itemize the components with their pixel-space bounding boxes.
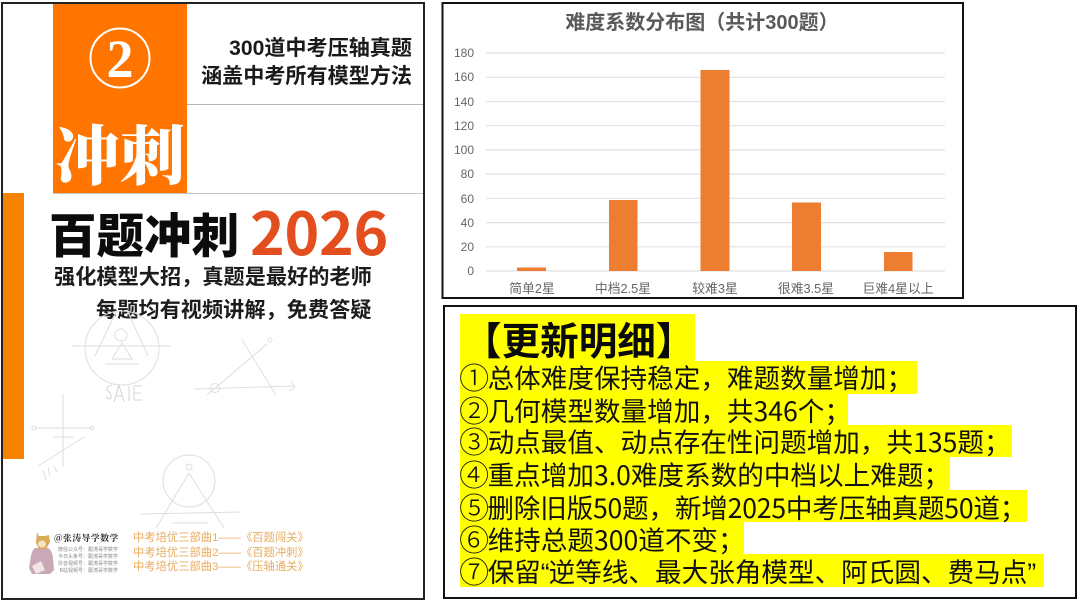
icon: doge mascot [29,532,54,574]
author accounts [58,546,118,574]
geometry sketches [32,310,296,528]
update list: 总体难度保持稳定，难题数量增加； [488,357,913,396]
y axis labels: 140 [454,95,474,109]
series list: 中考培优三部曲2——《百题冲刺》 [133,547,309,559]
divider line top [187,104,423,105]
x axis labels: 简单2星 [509,281,555,296]
author accounts: 今日头条号：跟涛哥学数学 [58,554,118,560]
update list: ② [459,387,489,431]
x axis labels: 中档2.5星 [595,281,651,296]
update list: 几何模型数量增加，共346个； [488,390,851,429]
update list: 重点增加3.0难度系数的中档以上难题； [488,454,950,493]
subheading line one: 强化模型大招，真题是最好的老师 [54,266,372,289]
update list: ① [459,354,489,398]
panel: update details [443,305,1077,599]
chart title: 难度系数分布图（共计300题） [565,11,839,34]
update heading: 【更新明细】 [463,311,694,367]
y axis labels: 40 [461,216,474,230]
x axis labels: 巨难4星以上 [862,281,934,296]
update list: ③ [459,418,489,462]
bars [517,70,912,271]
y axis labels: 180 [454,46,474,60]
update list: 动点最值、动点存在性问题增加，共135题； [488,421,1011,460]
x axis labels [509,281,934,296]
author accounts: 微信公众号：跟涛哥学数学 [58,547,118,553]
update list: 保留“逆等线、最大张角模型、阿氏圆、费马点” [488,551,1036,590]
y axis labels: 100 [454,143,474,157]
y axis labels: 60 [461,192,474,206]
x axis labels: 较难3星 [692,281,738,296]
author accounts: 抖音视频号：跟涛哥学数学 [58,561,118,567]
series list [133,531,309,573]
y axis labels: 160 [454,70,474,84]
panel: difficulty chart [442,2,964,299]
icon: circled number two [90,28,150,89]
main heading: 百题冲刺2026 [49,187,388,272]
y axis labels: 20 [461,240,474,254]
update list: 维持总题300道不变； [488,519,745,558]
x axis labels: 很难3.5星 [778,281,834,296]
update list: ⑦ [459,548,489,592]
y axis labels: 80 [461,167,474,181]
subheading line two: 每题均有视频讲解，免费答疑 [96,299,371,322]
author name: @张涛导学数学 [54,531,119,544]
update list: 删除旧版50题，新增2025中考压轴真题50道； [487,487,1026,526]
logo: mascot and author [29,531,119,574]
cover tagline [201,36,412,88]
update list: ⑤ [459,484,489,528]
update list: ④ [459,451,489,495]
orange title block [53,4,187,193]
orange side bar [3,193,24,459]
block title: sprint: 冲刺 [55,104,185,198]
author accounts: B站视频号：跟涛哥学数学 [60,568,118,574]
y axis labels: 0 [467,264,474,278]
series list: 中考培优三部曲1——《百题闯关》 [133,532,309,544]
y axis labels: 120 [454,119,474,133]
update list: ⑥ [459,516,489,560]
divider line middle [53,193,423,194]
series list: 中考培优三部曲3——《压轴通关》 [133,561,309,573]
y axis labels [454,46,474,278]
panel: book cover [1,2,425,600]
cover tagline: 涵盖中考所有模型方法 [201,65,412,88]
cover tagline: 300道中考压轴真题 [229,37,412,60]
icon: circled number two: 2 [106,29,134,89]
